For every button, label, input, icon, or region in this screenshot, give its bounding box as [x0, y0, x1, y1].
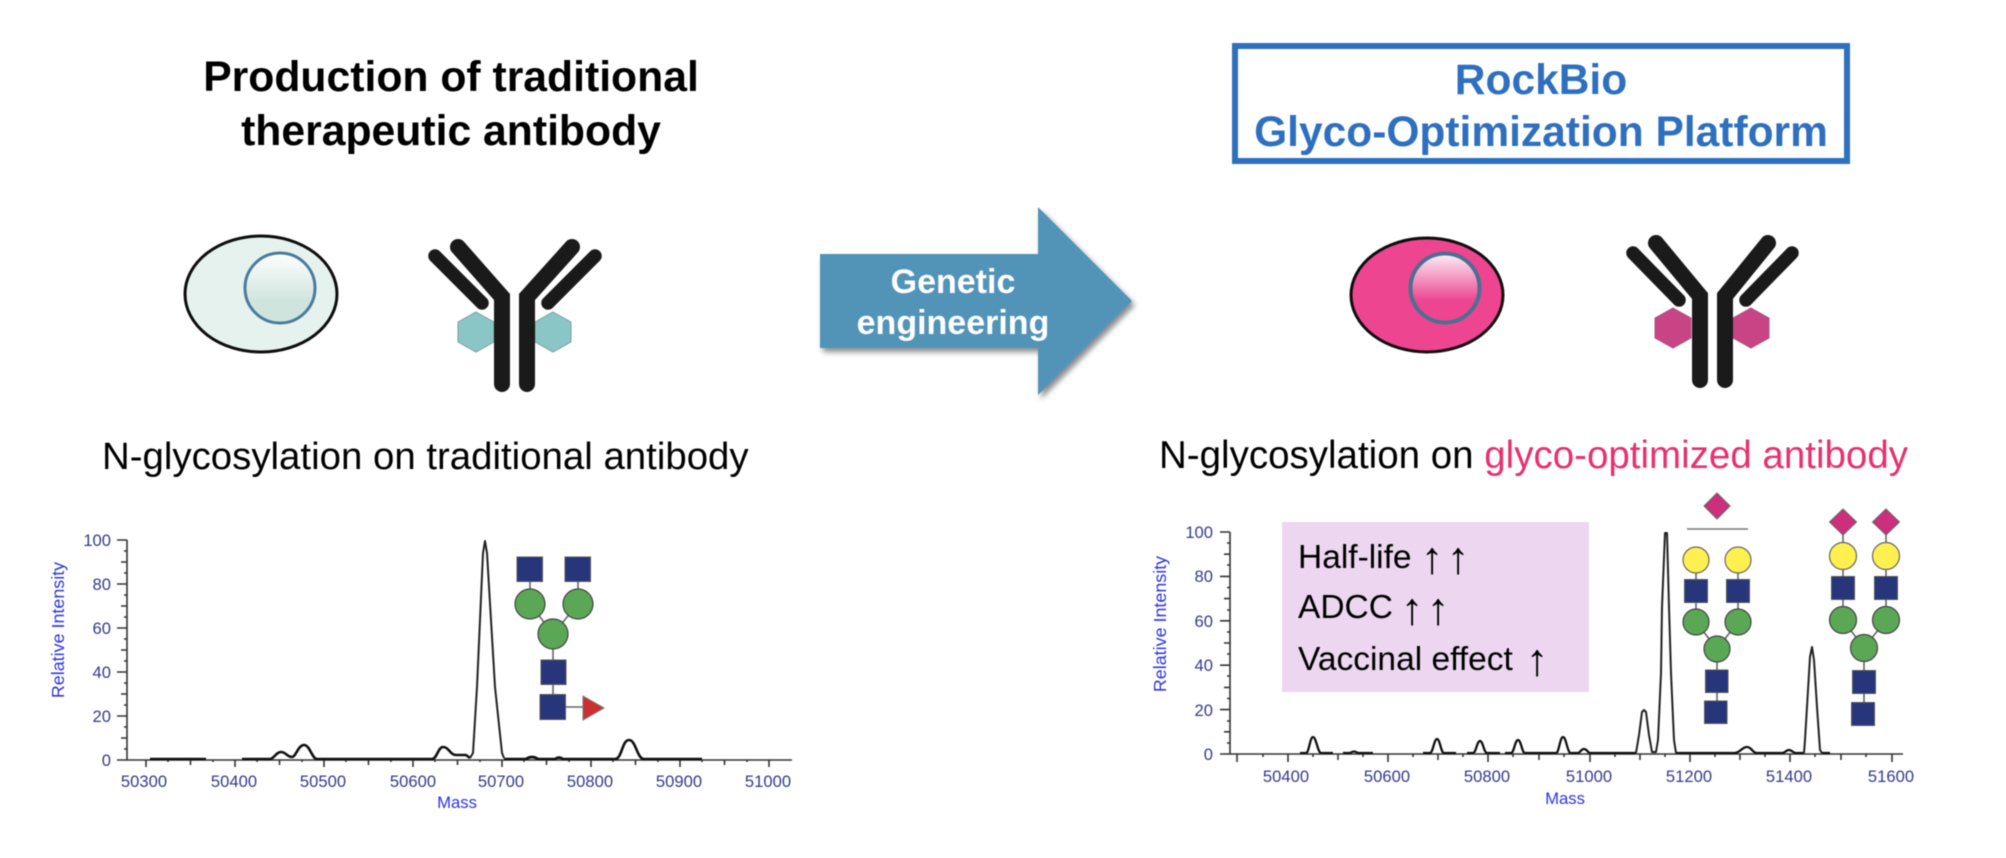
callout: improved effects: ↑ [1427, 583, 1449, 634]
arrow: genetic engineering [820, 207, 1132, 395]
x-axis tick labels: 51000 [745, 772, 791, 791]
glycan: mono-sialylated structure [1683, 493, 1751, 724]
x-axis tick labels: 51200 [1666, 767, 1712, 786]
heading: N-glycosylation on traditional antibody: N-glycosylation on traditional antibody [102, 435, 749, 478]
chart: traditional antibody mass spectrum [48, 531, 792, 812]
callout: improved effects [1282, 522, 1589, 692]
arrow: genetic engineering: Genetic [891, 263, 1015, 301]
title box: RockBio Glyco-Optimization Platform: Glyco-Optimization Platform [1254, 109, 1828, 156]
glycan: core-fucosylated G0F structure [515, 557, 604, 720]
callout: improved effects: ↑ [1421, 532, 1443, 583]
title: traditional antibody production: therapeutic antibody [241, 107, 661, 155]
y-axis tick labels: 20 [93, 707, 111, 726]
y-axis tick labels: 80 [1195, 567, 1213, 586]
y-axis tick labels: 60 [93, 619, 111, 638]
title box: RockBio Glyco-Optimization Platform: RockBio [1455, 57, 1627, 104]
y-axis tick labels: 60 [1195, 612, 1213, 631]
x-axis tick labels: 50600 [390, 772, 436, 791]
x-axis tick labels: 51600 [1868, 767, 1914, 786]
y-axis tick labels: 40 [93, 663, 111, 682]
x-axis tick labels: 50700 [478, 772, 524, 791]
icon: glyco-optimized antibody [1633, 243, 1792, 380]
x-axis tick labels: 51400 [1766, 767, 1812, 786]
y-axis tick labels: 40 [1195, 656, 1213, 675]
y-axis title: Relative Intensity [1150, 556, 1170, 692]
callout: improved effects: ↑ [1526, 634, 1548, 685]
y-axis tick labels: 0 [102, 751, 111, 770]
x-axis tick labels: 50800 [1464, 767, 1510, 786]
glycan: di-sialylated structure [1830, 509, 1900, 726]
callout: improved effects: ↑ [1401, 583, 1423, 634]
y-axis tick labels: 80 [93, 575, 111, 594]
arrow: genetic engineering: engineering [857, 304, 1049, 342]
x-axis tick labels: 50600 [1364, 767, 1410, 786]
x-axis tick labels: 50900 [656, 772, 702, 791]
icon: glyco-optimized cell [1351, 238, 1503, 352]
callout: improved effects: Vaccinal effect [1298, 641, 1513, 678]
y-axis title: Relative Intensity [48, 562, 68, 698]
chart: glyco-optimized antibody mass spectrum [1150, 523, 1914, 808]
title box: RockBio Glyco-Optimization Platform [1235, 46, 1847, 161]
icon: traditional cell [185, 236, 337, 352]
x-axis tick labels [1263, 767, 1914, 786]
y-axis tick labels: 20 [1195, 701, 1213, 720]
x-axis title: Mass [437, 793, 477, 812]
x-axis tick labels: 50400 [211, 772, 257, 791]
icon: traditional antibody [435, 247, 595, 384]
y-axis tick labels [83, 531, 111, 770]
x-axis tick labels: 50300 [121, 772, 167, 791]
y-axis tick labels: 100 [83, 531, 111, 550]
x-axis tick labels: 51000 [1566, 767, 1612, 786]
y-axis tick labels [1185, 523, 1213, 764]
y-axis tick labels: 0 [1204, 745, 1213, 764]
title: traditional antibody production: Production of traditional [203, 53, 699, 101]
x-axis tick labels [121, 772, 791, 791]
icon: sialic acid with bracket [1687, 493, 1748, 529]
y-axis tick labels: 100 [1185, 523, 1213, 542]
x-axis tick labels: 50400 [1263, 767, 1309, 786]
callout: improved effects: ↑ [1447, 532, 1469, 583]
x-axis tick labels: 50500 [300, 772, 346, 791]
heading: N-glycosylation on glyco-optimized antibody: N-glycosylation on glyco-optimized antibody [1159, 434, 1909, 477]
spectrum trace [1300, 533, 1830, 753]
spectrum trace [150, 541, 702, 759]
callout: improved effects: Half-life [1298, 539, 1412, 576]
x-axis tick labels: 50800 [567, 772, 613, 791]
x-axis title: Mass [1545, 789, 1585, 808]
callout: improved effects: ADCC [1298, 589, 1393, 626]
